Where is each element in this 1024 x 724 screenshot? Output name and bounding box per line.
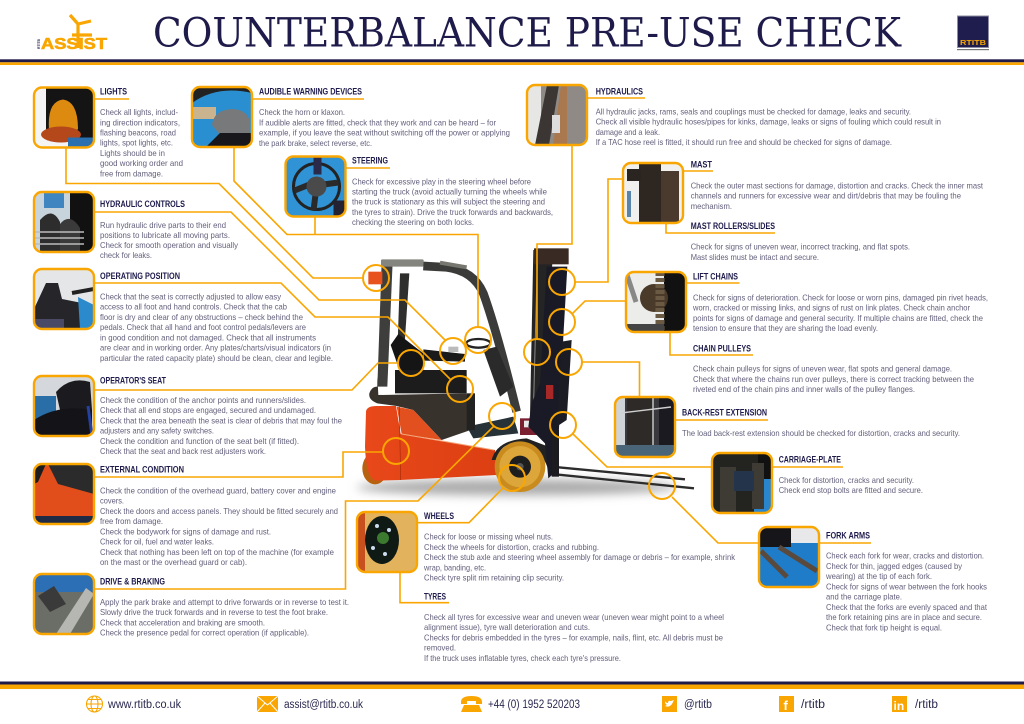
photo: pedals [34, 574, 94, 634]
text: on the mast or the overhead guard or cab). [100, 557, 247, 567]
text: checking the steering on both locks. [352, 217, 474, 227]
panel: wheels [357, 511, 736, 583]
text: worn, cracked or missing links, and signs of rust on link plates. Check chain anchor [692, 302, 970, 312]
text: wrap, banding, etc. [423, 562, 486, 572]
leader: wheels and tyres [400, 488, 503, 603]
text [100, 486, 338, 567]
text [596, 106, 941, 147]
heading: WHEELS [424, 511, 454, 521]
leader: carriage plate [573, 434, 843, 467]
photo: steering wheel [286, 156, 346, 216]
heading: OPERATOR'S SEAT [100, 376, 166, 386]
text: check for leaks. [100, 250, 152, 260]
photo: seat [34, 376, 94, 436]
text: Check for loose or missing wheel nuts. [424, 532, 553, 542]
leader: audible warning and steering [234, 99, 478, 327]
panel: operating position [34, 269, 333, 363]
text: riveted end of the chain pins and inner walls of the pulley flanges. [693, 384, 915, 394]
text: Check all visible hydraulic hoses/pipes for kinks, damage, leaks or signs of fouling which could result in [596, 117, 941, 127]
text: All hydraulic jacks, rams, seals and couplings must be checked for damage, leaks and security. [596, 106, 911, 116]
text [424, 612, 724, 663]
heading: HYDRAULICS [596, 86, 643, 96]
leader: fork arms [672, 497, 871, 543]
text [352, 176, 553, 227]
text: Check the condition and function of the seat belt (if fitted). [100, 436, 299, 446]
text [100, 107, 183, 178]
text [259, 107, 510, 148]
heading: OPERATING POSITION [100, 271, 180, 281]
leader: external condition [94, 452, 383, 477]
text: and the carriage plate. [826, 592, 902, 602]
text: Check all lights, includ- [100, 107, 178, 117]
photo: cab [34, 269, 94, 329]
text: floor is dry and clear of any obstructions – check behind the [100, 312, 303, 322]
heading: HYDRAULIC CONTROLS [100, 199, 185, 209]
panel: audible warning devices [192, 87, 510, 148]
text: Check for excessive play in the steering wheel before [352, 176, 531, 186]
text [100, 291, 333, 363]
text: Check for distortion, cracks and security. [779, 475, 914, 485]
leader: back-rest extension [582, 362, 768, 420]
footer: facebook: /rtitb [801, 699, 825, 711]
footer: website [86, 696, 181, 712]
heading: BACK-REST EXTENSION [682, 407, 767, 417]
text: are clear and in working order. Any plates/charts/visual indicators (in [100, 342, 331, 352]
text: Check the condition of the anchor points and runners/slides. [100, 395, 306, 405]
text [100, 597, 349, 638]
panel: chain pulleys [693, 343, 974, 394]
panel: fork arms [759, 527, 988, 632]
icon: globe [86, 696, 102, 712]
icon: phone [461, 696, 482, 712]
panel: lift chains [626, 272, 988, 333]
text [825, 551, 988, 632]
header logo: RTITB Assist: RTITB [37, 38, 41, 49]
text: Check that the seat and back rest adjusters work. [100, 446, 266, 456]
text: Check for oil, fuel and water leaks. [100, 537, 214, 547]
forklift illustration [357, 248, 694, 495]
text: mechanism. [691, 201, 732, 211]
text: Mast slides must be intact and secure. [691, 252, 819, 262]
text: Check end stop bolts are fitted and secure. [779, 485, 923, 495]
panel: external condition [34, 464, 338, 567]
text: Check that all end stops are engaged, secured and undamaged. [100, 405, 316, 415]
panel: tyres [424, 592, 724, 663]
header logo: RTITB [957, 16, 989, 50]
text [691, 180, 984, 211]
text: free from damage. [100, 168, 163, 178]
footer: twitter: @rtitb [684, 699, 712, 711]
text [100, 395, 342, 456]
text: Checks for debris embedded in the tyres – for example, nails, flint, etc. All debris must be [424, 632, 723, 642]
text: adjusters and any safety switches. [100, 426, 214, 436]
panel: hydraulics [527, 85, 941, 147]
icon: twitter [662, 696, 677, 712]
text: Check for signs of wear between the fork hooks [826, 581, 987, 591]
text: points for signs of damage and general security. If multiple chains are fitted, check the [693, 313, 983, 323]
heading: STEERING [352, 156, 388, 166]
text: the fork retaining pins are in place and secure. [826, 612, 982, 622]
text: Check that where the chains run over pulleys, there is correct tracking between the [693, 374, 974, 384]
heading: TYRES [424, 592, 446, 602]
panel: steering [286, 156, 553, 227]
photo: chains [626, 272, 686, 332]
text: Check that the area beneath the seat is clear of debris that may foul the [100, 416, 342, 426]
header logo: RTITB Assist [37, 15, 108, 53]
text: example, if you leave the seat without switching off the power or applying [259, 128, 510, 138]
text: the truck is stationary as this will subject the steering and [352, 197, 545, 207]
footer: linkedin: /rtitb [915, 699, 938, 711]
heading: AUDIBLE WARNING DEVICES [259, 87, 362, 97]
text: Check each fork for wear, cracks and distortion. [826, 551, 984, 561]
footer: website: www.rtitb.co.uk [107, 699, 181, 711]
text: ing direction indicators, [100, 117, 180, 127]
text: flashing beacons, road [100, 128, 176, 138]
text: wearing) at the tip of each fork. [825, 571, 932, 581]
leader: drive and braking [94, 426, 494, 589]
footer rule [0, 682, 1024, 689]
forklift callout circles [363, 265, 675, 499]
photo: beacon [34, 88, 94, 148]
panel: back-rest extension [615, 397, 960, 457]
text: Check for signs of uneven wear, incorrect tracking, and flat spots. [691, 242, 910, 252]
text: Check that nothing has been left on top of the machine (for example [100, 547, 334, 557]
text: the tyres to strain). Drive the truck forwards and backwards, [352, 207, 553, 217]
text: particular the rated capacity plate) should be clean, clear and legible. [100, 353, 333, 363]
text: tension to ensure that they are sharing the load evenly. [693, 323, 878, 333]
text: Check chain pulleys for signs of uneven wear, flat spots and general damage. [693, 364, 952, 374]
text: Slowly drive the truck forwards and in reverse to test the foot brake. [100, 607, 328, 617]
panel: mast rollers/slides [691, 221, 910, 262]
text: the park brake, select reverse, etc. [259, 138, 372, 148]
text: Check tyre split rim retaining clip security. [424, 573, 564, 583]
text: Check that acceleration and braking are smooth. [100, 618, 265, 628]
panel: drive and braking [34, 574, 349, 638]
text: Check that the seat is correctly adjusted to allow easy [100, 291, 282, 301]
icon: facebook: f [784, 698, 788, 713]
heading: MAST ROLLERS/SLIDES [691, 221, 775, 231]
leader: hydraulic controls [95, 212, 446, 341]
leader: hydraulics [537, 98, 645, 339]
heading: CARRIAGE-PLATE [779, 455, 841, 465]
text: channels and runners for excessive wear and dirt/debris that may be fouling the [691, 190, 961, 200]
heading: LIFT CHAINS [693, 272, 738, 282]
photo: mast [623, 163, 683, 223]
text: positions to lubricate all moving parts. [100, 230, 230, 240]
title: COUNTERBALANCE PRE-USE CHECK [153, 8, 902, 56]
text: Check the bodywork for signs of damage and rust. [100, 526, 271, 536]
photo: wheel [357, 512, 417, 572]
text: If audible alerts are fitted, check that they work and can be heard – for [259, 118, 496, 128]
leader: lights [66, 99, 363, 278]
panel: lights [34, 86, 183, 178]
text [779, 475, 923, 495]
footer: email [257, 696, 363, 712]
text: Check that fork tip height is equal. [826, 622, 942, 632]
text: Check for smooth operation and visually [100, 240, 239, 250]
photo: carriage plate [712, 453, 772, 513]
header logo: RTITB: RTITB [960, 40, 986, 47]
text: pedals. Check that all hand and foot control pedals/levers are [100, 322, 306, 332]
heading: DRIVE & BRAKING [100, 577, 165, 587]
text: Check the wheels for distortion, cracks and rubbing. [424, 542, 599, 552]
text [691, 242, 910, 262]
text: If a TAC hose reel is fitted, it should run free and should be checked for signs of damage. [596, 137, 892, 147]
header logo: RTITB Assist: ASSIST [41, 36, 108, 53]
heading: EXTERNAL CONDITION [100, 465, 184, 475]
text: Check the doors and access panels. They should be fitted securely and [100, 506, 338, 516]
text: starting the truck (avoid actually turning the wheels while [352, 186, 547, 196]
photo: forks [759, 527, 819, 587]
photo: horn [192, 87, 252, 147]
footer: telephone: +44 (0) 1952 520203 [488, 699, 580, 711]
heading: CHAIN PULLEYS [693, 343, 751, 353]
footer: email: assist@rtitb.co.uk [284, 699, 363, 711]
photo: back-rest [615, 397, 675, 457]
leader lines connecting photos to forklift [66, 98, 871, 603]
text: Check the stub axle and steering wheel assembly for damage or debris – for example, shrink [424, 552, 736, 562]
text [423, 532, 736, 583]
icon: linkedin: in [894, 699, 904, 713]
icon: envelope [257, 696, 278, 712]
text: Lights should be in [100, 148, 165, 158]
heading: LIGHTS [100, 86, 127, 96]
leader: mast and rollers [575, 171, 775, 282]
text: lights, spot lights, etc. [100, 138, 173, 148]
text: free from damage. [100, 516, 163, 526]
footer: twitter [662, 696, 712, 712]
text: Check the horn or klaxon. [259, 107, 345, 117]
text: Check for thin, jagged edges (caused by [826, 561, 963, 571]
text: damage and a leak. [596, 127, 660, 137]
panel: operator's seat [34, 376, 342, 456]
text [100, 220, 239, 260]
photo: hoses [527, 85, 587, 145]
panel: mast [623, 160, 984, 223]
text: The load back-rest extension should be checked for distortion, cracks and security. [682, 428, 960, 438]
footer: telephone [461, 696, 580, 712]
text: good working order and [100, 158, 183, 168]
footer: linkedin [892, 696, 938, 713]
footer: facebook [779, 696, 825, 713]
leader: operating position [94, 283, 451, 380]
text: Check the presence pedal for correct operation (if applicable). [100, 628, 309, 638]
text: Apply the park brake and attempt to drive forwards or in reverse to test it. [100, 597, 349, 607]
text: alignment issue), tyre wall deterioration and cuts. [424, 622, 590, 632]
leader: operator's seat [94, 363, 398, 390]
text: Run hydraulic drive parts to their end [100, 220, 226, 230]
panel: carriage-plate [712, 453, 923, 513]
text [692, 292, 988, 333]
text: Check for signs of deterioration. Check for loose or worn pins, damaged pin rivet heads, [693, 292, 988, 302]
photo: bodywork [34, 464, 94, 524]
leader: lift chains and pulleys [572, 283, 753, 355]
heading: MAST [691, 160, 712, 170]
text: Check that the forks are evenly spaced and that [826, 602, 988, 612]
text: Check all tyres for excessive wear and uneven wear (uneven wear might point to a wheel [424, 612, 724, 622]
text: removed. [424, 643, 456, 653]
text: covers. [100, 496, 124, 506]
header rule [0, 59, 1024, 65]
text: in good condition and not damaged. Check that all instruments [100, 332, 316, 342]
text: Check the condition of the overhead guard, battery cover and engine [100, 486, 336, 496]
photo: levers [34, 192, 94, 252]
text: If the truck uses inflatable tyres, check each tyre's pressure. [424, 653, 621, 663]
text: Check the outer mast sections for damage, distortion and cracks. Check the inner mast [691, 180, 984, 190]
heading: FORK ARMS [826, 530, 870, 540]
panel: hydraulic controls [34, 192, 239, 260]
text [693, 364, 974, 394]
text: access to all foot and hand controls. Check that the cab [100, 302, 287, 312]
